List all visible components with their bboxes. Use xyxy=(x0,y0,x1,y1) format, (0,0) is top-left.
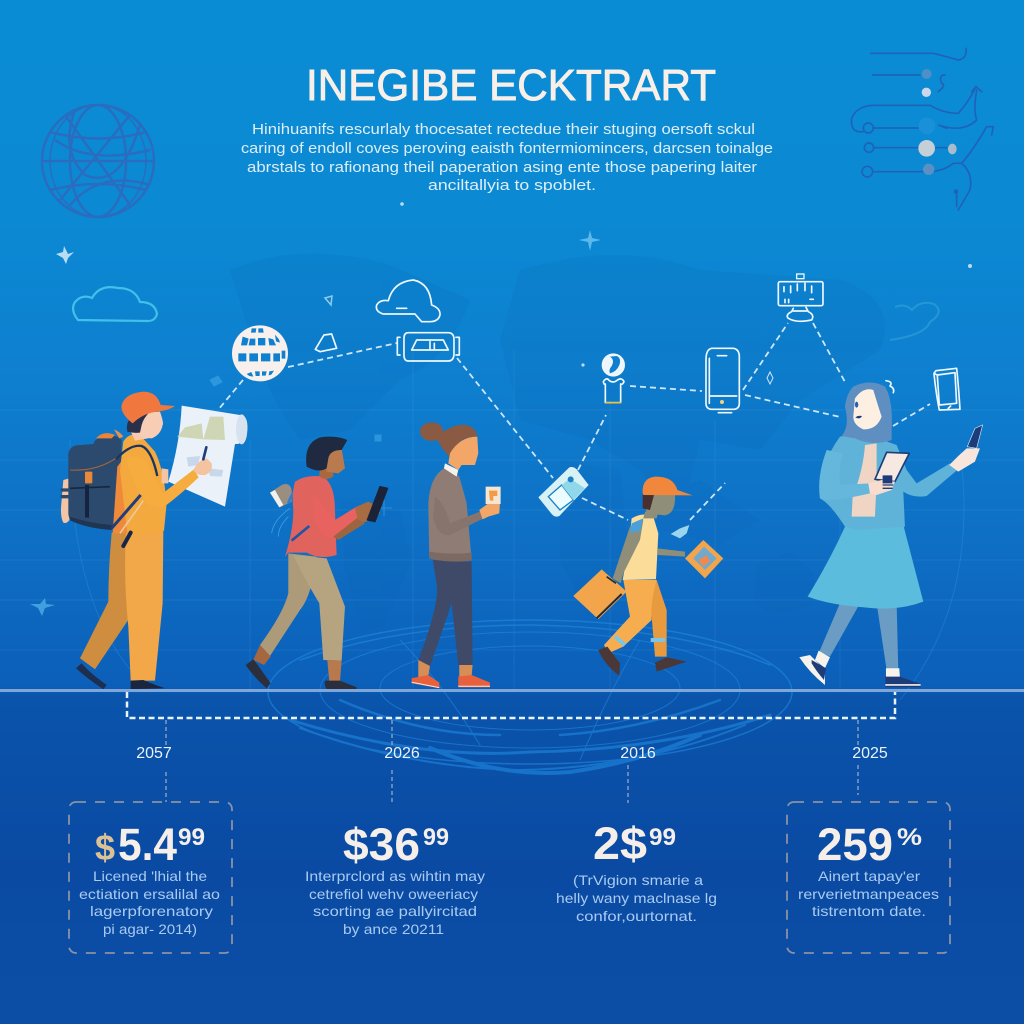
stat column: 2026 xyxy=(305,745,485,937)
red top xyxy=(285,476,362,557)
hiker arm and hand xyxy=(127,447,212,508)
figure: woman with dark phone xyxy=(246,437,388,689)
stat description: lagerpforenatory xyxy=(90,903,213,919)
stat column: 2016 xyxy=(556,745,717,924)
icon: phone right xyxy=(934,368,960,410)
icon: small triangle shape xyxy=(315,334,337,352)
stat column: 2026: 2026 xyxy=(384,745,420,762)
stat card border xyxy=(787,802,950,953)
stat description: scorting ae pallyircitad xyxy=(313,903,477,919)
stat value: 2$ xyxy=(593,818,647,869)
icon: cloud centre xyxy=(376,280,440,322)
child legs and shoes xyxy=(598,580,687,676)
hand and card xyxy=(479,487,501,519)
stat description: Interprclord as wihtin may xyxy=(305,868,485,884)
icon: faint cloud right xyxy=(890,303,939,340)
hiker jacket xyxy=(112,435,168,546)
hiker backpack xyxy=(68,429,123,530)
hiker map xyxy=(168,406,247,507)
stat description xyxy=(79,868,220,937)
icon: book device xyxy=(397,333,459,361)
intro paragraph: caring of endoll coves peroving eaisth fontermiomincers, darcsen toinalge xyxy=(241,141,773,157)
small fish icon xyxy=(671,525,689,538)
stat description: rerverietmanpeaces xyxy=(798,886,939,902)
intro paragraph: abrstals to rafionang theil paperation asing ente those papering laiter xyxy=(247,160,757,176)
stat description: by ance 20211 xyxy=(343,921,444,937)
stat description: cetrefiol wehv oweeriacy xyxy=(309,886,478,902)
hiker trousers xyxy=(76,531,165,689)
child tablet xyxy=(685,540,723,578)
ground line xyxy=(0,689,1024,692)
stat value: 259 xyxy=(817,819,893,870)
child shirt and arms xyxy=(613,515,685,583)
stat value: 99 xyxy=(649,824,676,851)
stat description: ectiation ersalilal ao xyxy=(79,886,220,902)
stat value xyxy=(95,819,205,870)
small sparkles xyxy=(30,202,972,616)
stat description: helly wany maclnase lg xyxy=(556,890,717,906)
woman tablet and hand xyxy=(868,452,909,495)
woman raised hand and phone xyxy=(949,425,983,472)
woman legs and shoes xyxy=(799,603,921,687)
child head and cap xyxy=(643,477,693,518)
swirl globe rings xyxy=(268,620,792,773)
stat value: % xyxy=(897,824,922,851)
stat value xyxy=(593,818,676,869)
head and hair xyxy=(306,437,347,479)
stat value: $36 xyxy=(343,819,420,870)
head and bun xyxy=(420,422,478,477)
icon: phone centre xyxy=(706,348,739,413)
figure: hiker with map xyxy=(61,392,247,689)
arms and phone xyxy=(333,487,388,540)
dashed timeline bracket xyxy=(127,692,895,718)
trousers and red shoes xyxy=(412,560,490,688)
stat value: 5.4 xyxy=(118,819,177,870)
title: INEGIBE ECKTRART xyxy=(306,61,716,110)
icon: globe on small stand xyxy=(602,353,625,403)
year connectors xyxy=(166,720,858,803)
stat description: pi agar- 2014) xyxy=(103,921,197,937)
stat card border xyxy=(69,802,232,953)
stat value: $ xyxy=(95,827,115,868)
hiker rear hand xyxy=(61,478,69,523)
icon: monitor xyxy=(778,274,823,321)
dashed network links xyxy=(218,323,930,520)
icon: white globe xyxy=(232,325,288,381)
figure: woman with card xyxy=(412,422,501,688)
icon: small floating card xyxy=(538,467,589,517)
icon: circuit network xyxy=(851,48,993,210)
stat description: (TrVigion smarie a xyxy=(573,872,703,888)
intro paragraph xyxy=(241,122,773,194)
intro paragraph: Hinihuanifs rescurlaly thocesatet rectedue their stuging oersoft sckul xyxy=(252,122,755,138)
stat column: 2025 xyxy=(787,745,950,953)
background grid lines xyxy=(0,340,1024,690)
stat value: 99 xyxy=(423,824,449,851)
hiker head and cap xyxy=(121,392,175,441)
woman coat xyxy=(819,435,957,530)
stat description: confor,ourtornat. xyxy=(576,908,697,924)
stat column: 2057 xyxy=(69,745,232,953)
stat column: 2016: 2016 xyxy=(620,745,656,762)
trousers and shoes xyxy=(246,553,357,689)
woman skirt xyxy=(808,525,923,609)
figure: child with case xyxy=(573,477,723,676)
stat description xyxy=(305,868,485,937)
icon: cloud left xyxy=(73,287,157,321)
intro paragraph: anciltallyia to spoblet. xyxy=(428,178,596,194)
stat description: tistrentom date. xyxy=(812,903,926,919)
background world map xyxy=(230,254,885,632)
figure: woman in blue coat xyxy=(799,381,983,687)
stat value: 99 xyxy=(178,824,205,851)
background arcs xyxy=(70,440,964,700)
woman head and hair xyxy=(842,381,894,443)
stat description xyxy=(556,872,717,924)
stat description: Licened 'lhial the xyxy=(93,868,207,884)
backpack and book xyxy=(270,484,292,537)
child case xyxy=(573,569,627,619)
stat description: Ainert tapay'er xyxy=(818,868,920,884)
stat description xyxy=(798,868,939,919)
stat column: 2057: 2057 xyxy=(136,745,172,762)
icon: outline globe xyxy=(42,105,154,217)
stat column: 2025: 2025 xyxy=(852,745,888,762)
sweater xyxy=(428,468,483,562)
